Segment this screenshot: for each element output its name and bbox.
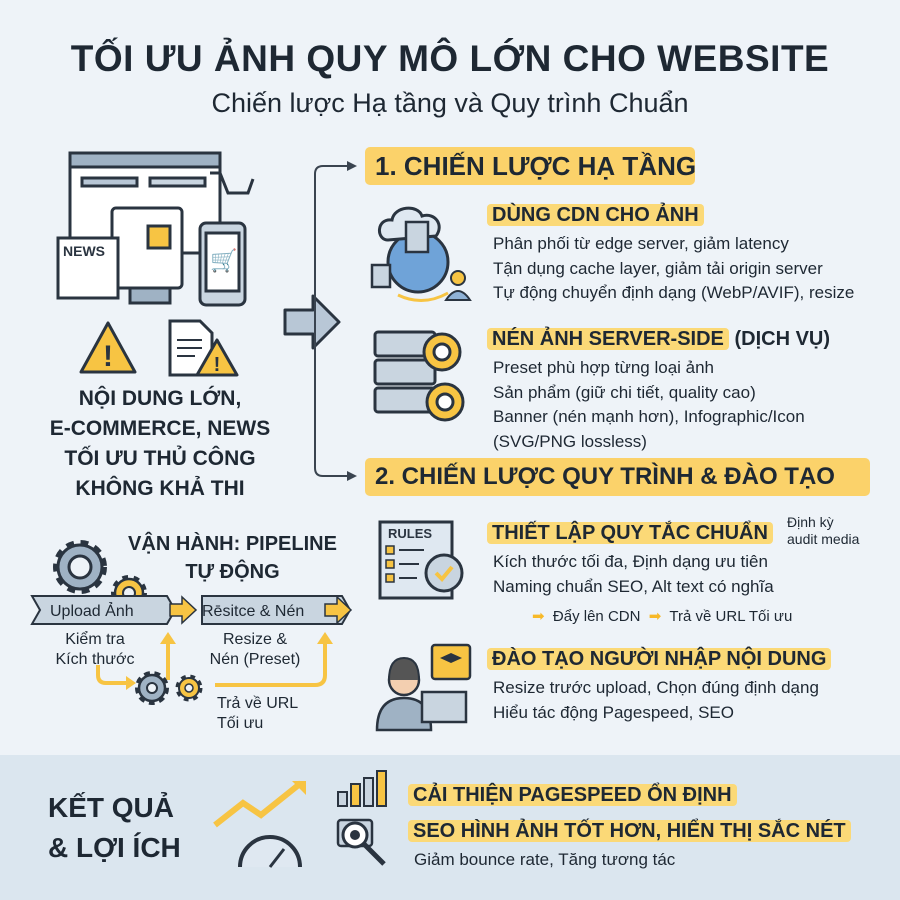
results heading: & LỢI ÍCH — [48, 832, 181, 863]
heading: section 1: 1. CHIẾN LƯỢC HẠ TẦNG — [375, 151, 696, 181]
pipeline panel: Nén (Preset) — [210, 651, 300, 668]
problem text: KHÔNG KHẢ THI — [75, 477, 245, 500]
cdn block: Tự động chuyển định dạng (WebP/AVIF), resize — [493, 283, 854, 302]
icon: warning triangle: ! — [103, 340, 113, 373]
icon: camera magnifier — [336, 818, 386, 866]
results text: SEO HÌNH ẢNH TỐT HƠN, HIỂN THỊ SẮC NÉT — [413, 820, 846, 842]
problem text: TỐI ƯU THỦ CÔNG — [64, 447, 256, 470]
icon: gears — [53, 540, 147, 595]
pipeline panel — [30, 532, 352, 732]
problem text: E-COMMERCE, NEWS — [50, 417, 270, 440]
pipeline labels: Kiểm tra — [65, 631, 125, 648]
icon: cdn cloud globe — [370, 206, 472, 302]
rules block: Naming chuẩn SEO, Alt text có nghĩa — [493, 576, 774, 596]
cdn block: DÙNG CDN CHO ẢNH — [492, 204, 699, 226]
compression block: Banner (nén mạnh hơn), Infographic/Icon — [493, 407, 805, 426]
icon: server gears — [374, 330, 464, 422]
training block: Hiểu tác động Pagespeed, SEO — [493, 702, 734, 722]
heading: section 2: 2. CHIẾN LƯỢC QUY TRÌNH & ĐÀO TẠO — [375, 463, 835, 490]
pipeline banner: Upload Ảnh — [50, 601, 134, 620]
pipeline flow arrows — [96, 632, 333, 705]
rules block: THIẾT LẬP QUY TẮC CHUẨN — [492, 522, 768, 544]
problem text — [50, 386, 270, 500]
results heading: KẾT QUẢ — [48, 792, 174, 823]
compression block: Preset phù hợp từng loại ảnh — [493, 358, 714, 377]
cdn block: Phân phối từ edge server, giảm latency — [493, 234, 789, 253]
problem text: NỘI DUNG LỚN, — [79, 387, 241, 410]
arrow: big grey — [284, 294, 341, 350]
icon: devices illustration — [56, 152, 254, 306]
training block — [487, 646, 831, 722]
icon: bar chart — [337, 770, 387, 807]
cdn block — [487, 202, 854, 302]
pipeline labels: Kích thước — [55, 651, 134, 668]
pipeline heading: TỰ ĐỘNG — [185, 561, 280, 583]
icon: document warning: ! — [214, 354, 220, 376]
compression block: (SVG/PNG lossless) — [493, 432, 647, 450]
subtitle: Chiến lược Hạ tầng và Quy trình Chuẩn — [211, 88, 689, 118]
training block: Resize trước upload, Chọn đúng định dạng — [493, 678, 819, 697]
pipeline panel: Trả về URL — [217, 695, 298, 712]
icon: warning triangle — [80, 321, 137, 374]
pipeline heading: VẬN HÀNH: PIPELINE — [128, 533, 337, 555]
icon: growth gauge — [213, 780, 306, 868]
pipeline heading — [128, 532, 337, 583]
compression block: Sản phẩm (giữ chi tiết, quality cao) — [493, 382, 756, 402]
results heading — [48, 792, 181, 863]
rules block: ➡ Đẩy lên CDN ➡ Trả về URL Tối ưu — [532, 608, 792, 625]
results text: CẢI THIỆN PAGESPEED ỔN ĐỊNH — [413, 784, 732, 806]
pipeline banner: Rēsitce & Nén — [202, 603, 304, 620]
pipeline labels — [55, 631, 134, 668]
icon: trainer person — [376, 644, 472, 732]
heading: section 2 — [365, 458, 870, 496]
icon: devices illustration: 🛒 — [210, 248, 237, 273]
rules block: Định kỳ — [787, 514, 834, 530]
pipeline panel: Resize & — [223, 631, 287, 648]
cdn block: Tận dụng cache layer, giảm tải origin server — [493, 258, 823, 278]
rules block — [487, 514, 860, 625]
bottom band — [0, 755, 900, 900]
rules block: Kích thước tối đa, Định dạng ưu tiên — [493, 552, 768, 571]
title: TỐI ƯU ẢNH QUY MÔ LỚN CHO WEBSITE — [71, 38, 829, 79]
pipeline banner — [30, 595, 352, 625]
icon: rules document: RULES — [388, 526, 432, 541]
rules block: audit media — [787, 531, 859, 547]
icon: devices illustration: NEWS — [63, 243, 105, 259]
training block: ĐÀO TẠO NGƯỜI NHẬP NỘI DUNG — [492, 648, 826, 670]
results text — [408, 782, 851, 869]
pipeline panel: Tối ưu — [217, 715, 263, 732]
icon: rules document — [378, 520, 464, 600]
bracket connector — [314, 161, 357, 481]
icon: document warning — [168, 320, 239, 376]
compression block — [487, 326, 830, 450]
compression block: NÉN ẢNH SERVER-SIDE (DỊCH VỤ) — [492, 328, 830, 350]
results text: Giảm bounce rate, Tăng tương tác — [414, 850, 675, 869]
